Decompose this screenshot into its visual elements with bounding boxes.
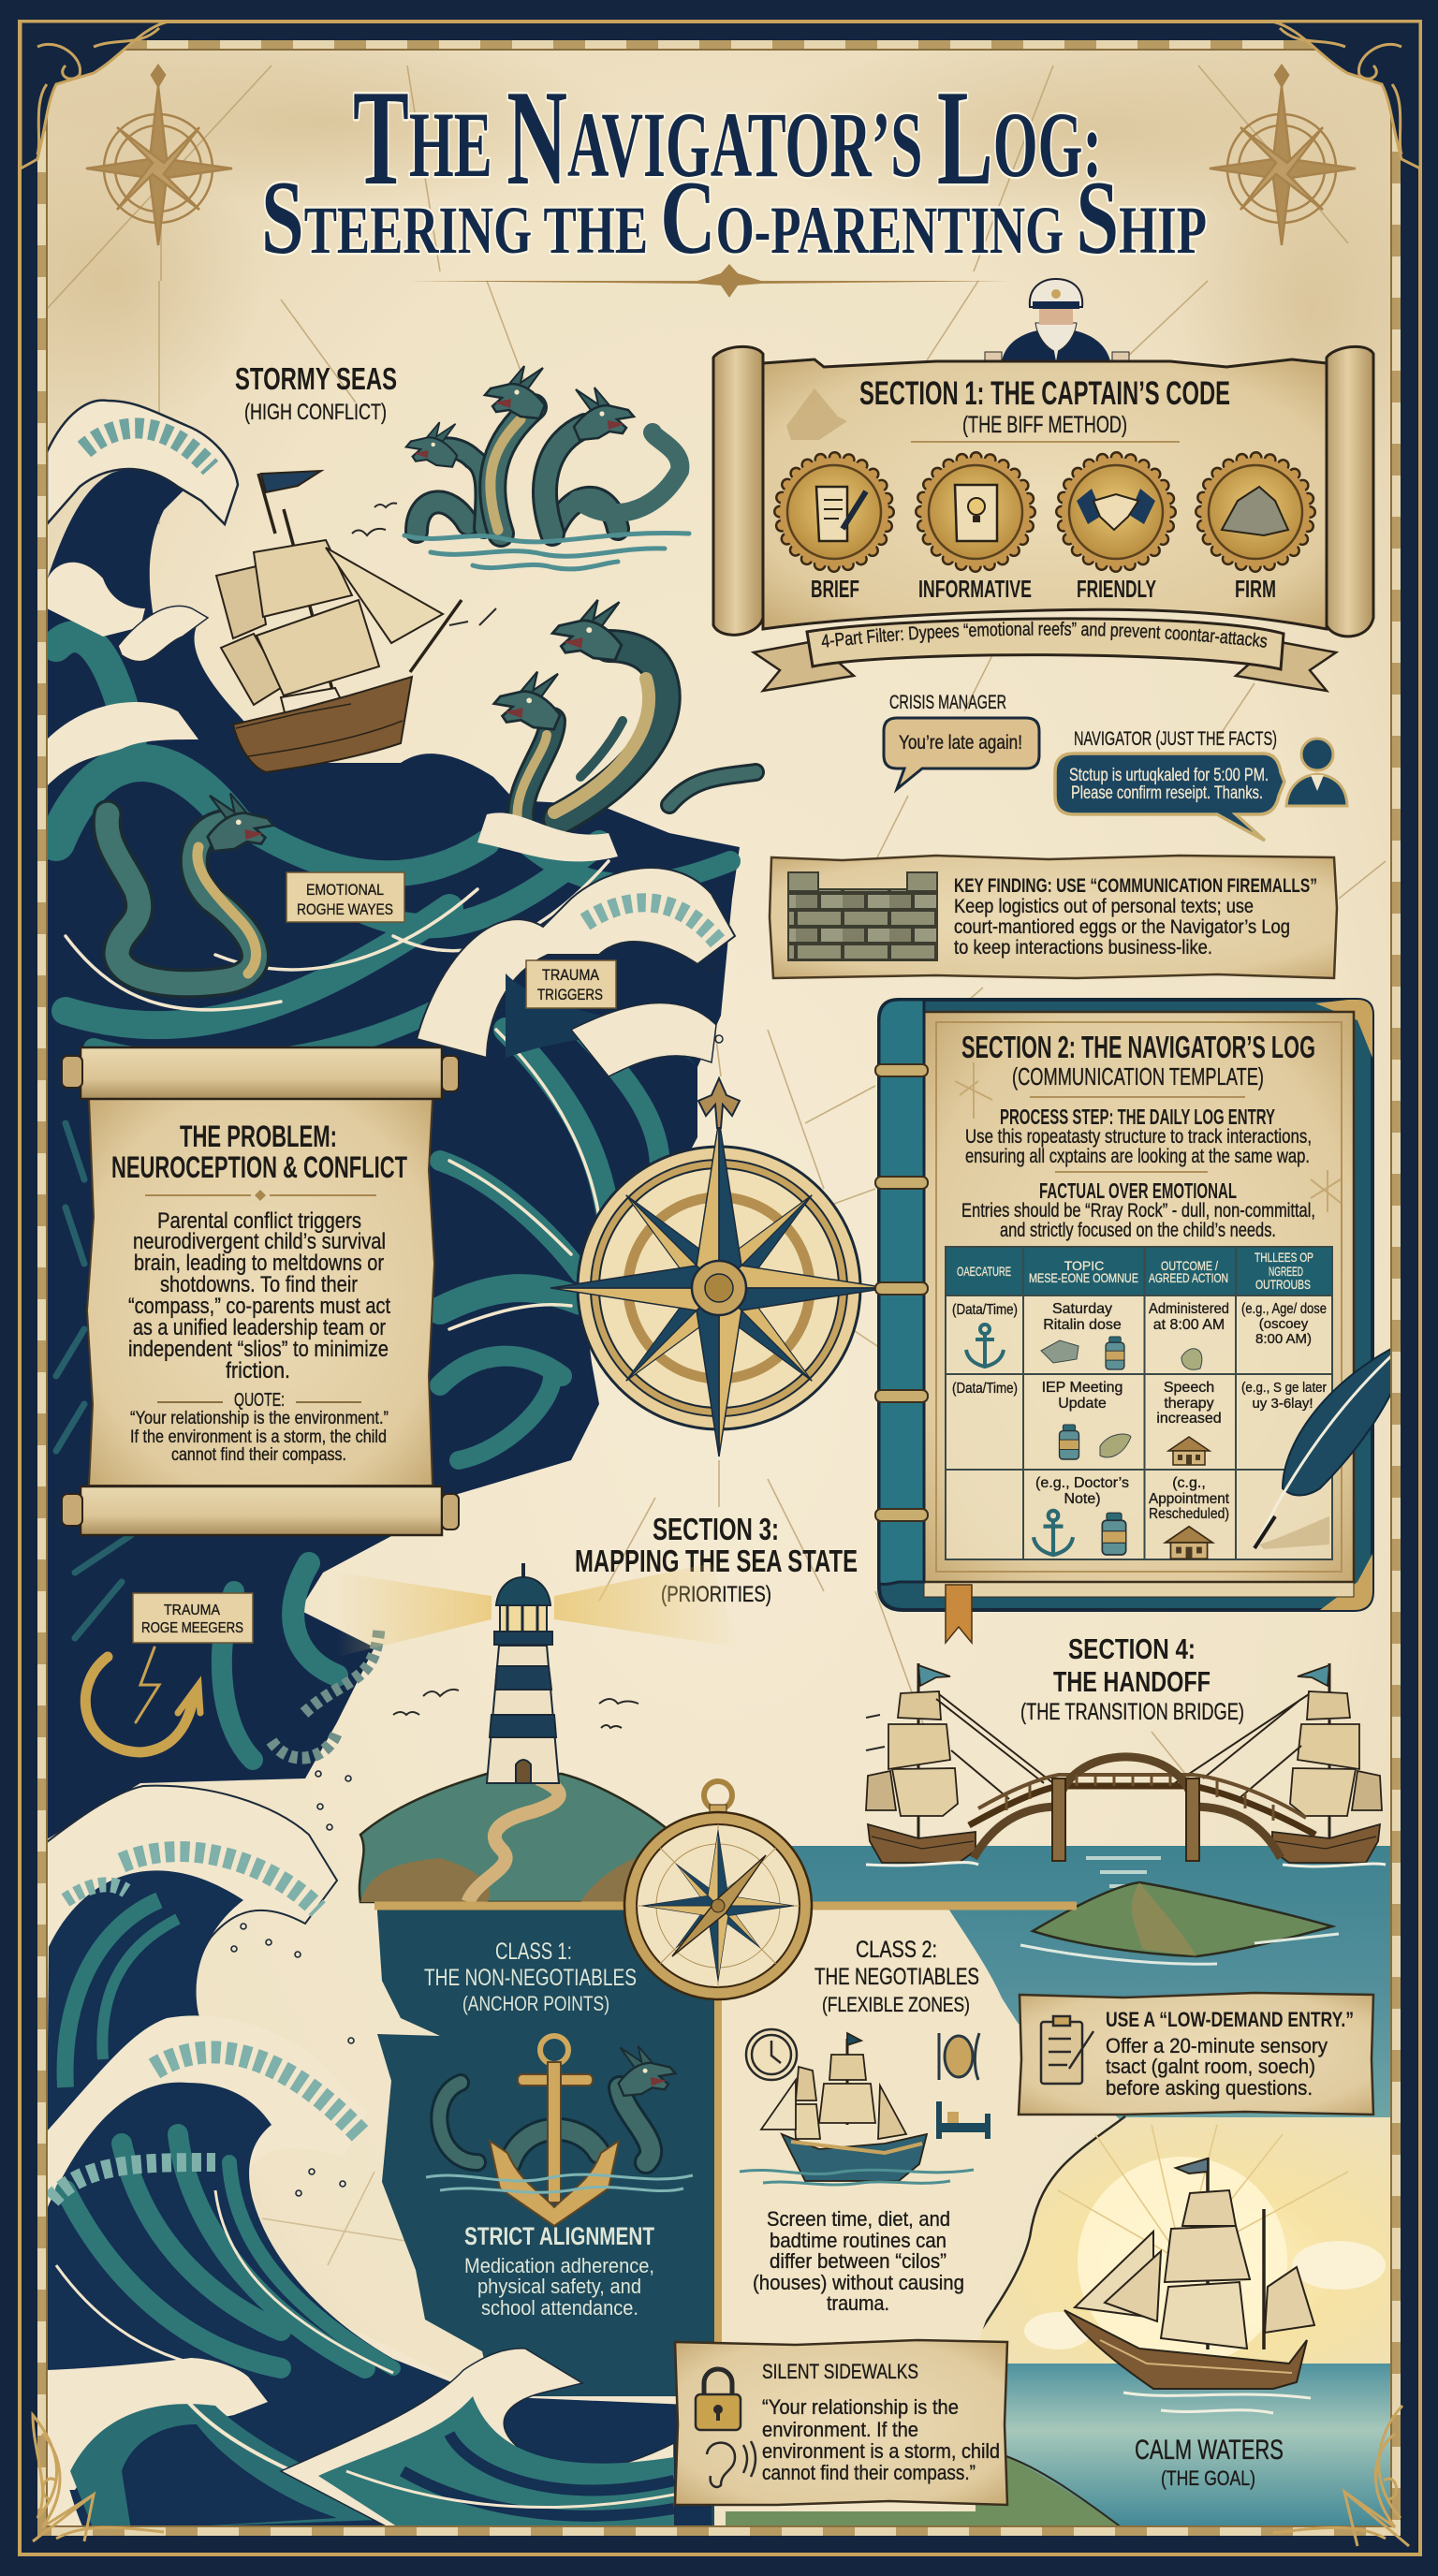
corner ornament bottom right	[1273, 2406, 1409, 2546]
calm waters scene background	[726, 2116, 1395, 2530]
banner: 4-part filter	[751, 617, 1339, 693]
icon: clipboard	[1041, 2016, 1093, 2084]
problem scroll: friction.	[226, 1358, 290, 1383]
corner ornament top left	[21, 22, 169, 168]
low-demand entry card: USE A “LOW-DEMAND ENTRY.”	[1106, 2008, 1354, 2031]
scroll paper	[763, 359, 1327, 629]
wave A	[47, 1786, 337, 2144]
log table: increased	[1156, 1411, 1222, 1427]
class 1 panel background	[377, 1906, 714, 2530]
log table: uy 3-6lay!	[1252, 1396, 1313, 1412]
calm ship	[1064, 2158, 1314, 2413]
section 2 logbook	[875, 1000, 1410, 1643]
section 4 sea	[714, 1846, 1395, 2125]
section 2 logbook: Use this ropeatasty structure to track interactions,	[965, 1126, 1312, 1148]
section 2 logbook: FACTUAL OVER EMOTIONAL	[1039, 1178, 1237, 1203]
title: T	[353, 62, 409, 213]
silent sidewalks card: environment. If the	[762, 2418, 918, 2441]
banner: 4-part filter: 4-Part Filter: Dypees “emotional reefs” and prevent coontar-attacks	[822, 622, 1268, 648]
corner ornament bottom left	[33, 2415, 164, 2541]
right ship	[1272, 1663, 1382, 1863]
icon: padlock	[696, 2369, 741, 2430]
label: emotional rogue waves: EMOTIONAL	[306, 881, 384, 899]
section 2 logbook: and strictly focused on the child’s needs.	[1000, 1220, 1276, 1241]
title divider	[408, 264, 1009, 298]
title: STEERING THE CO-PARENTING SHIP	[261, 160, 1207, 276]
icon: gold anchor fluke	[85, 1647, 200, 1752]
navigator bubble: Stctup is urtuqkaled for 5:00 PM.	[1069, 766, 1269, 785]
ship watermark	[786, 388, 847, 440]
log table: Ritalin dose	[1043, 1317, 1122, 1333]
class 2: negotiables: Screen time, diet, and	[767, 2207, 950, 2231]
log table: OUTCOME /	[1161, 1258, 1218, 1273]
medallion: brief	[780, 458, 888, 566]
key finding card: to keep interactions business-like.	[954, 937, 1212, 959]
icon: clock	[746, 2029, 797, 2080]
log table: (oscoey	[1259, 1316, 1309, 1332]
lighthouse light beams	[337, 1563, 740, 1657]
medallion: informative	[921, 458, 1030, 566]
label: trauma rogue meegers: TRAUMA	[164, 1603, 220, 1618]
log table: OUTROUBS	[1255, 1277, 1311, 1292]
section 4 heading: THE HANDOFF	[1053, 1665, 1211, 1698]
log table: THLLEES OP	[1255, 1250, 1313, 1265]
class 1: non-negotiables: STRICT ALIGNMENT	[464, 2222, 654, 2250]
section 2 logbook: PROCESS STEP: THE DAILY LOG ENTRY	[1000, 1105, 1275, 1129]
medallion: firm	[1201, 458, 1310, 566]
class 2: negotiables: badtime routines can	[770, 2229, 946, 2252]
calm waters label: (THE GOAL)	[1161, 2466, 1255, 2490]
problem scroll: “Your relationship is the environment.”	[130, 1409, 389, 1428]
problem scroll: as a unified leadership team or	[133, 1315, 386, 1340]
anchor	[490, 2036, 619, 2226]
class 2: negotiables: CLASS 2:	[856, 1937, 937, 1963]
log table: NGREED	[1269, 1264, 1303, 1279]
log table: (Data/Time)	[952, 1381, 1018, 1397]
section 2 logbook: ensuring all cxptains are looking at the same wap.	[965, 1146, 1310, 1167]
icon: navigator person	[1286, 739, 1347, 806]
wave B	[47, 2015, 712, 2530]
label: emotional rogue waves	[286, 872, 404, 922]
silent sidewalks card: environment is a storm, child	[762, 2439, 1000, 2463]
pocket compass	[624, 1781, 812, 1999]
crisis manager bubble: You’re late again!	[899, 732, 1022, 754]
silent sidewalks card	[675, 2340, 1007, 2505]
silent sidewalks card: “Your relationship is the	[762, 2395, 959, 2419]
gold chart lines	[374, 1906, 1077, 2349]
wave C bottom left	[47, 2358, 268, 2490]
title: L	[937, 62, 993, 213]
class 2: negotiables: differ between “cilos”	[770, 2249, 946, 2273]
captain	[985, 279, 1129, 365]
log table: AGREED ACTION	[1149, 1270, 1228, 1285]
calm waters label	[1135, 2435, 1284, 2490]
log table	[946, 1247, 1332, 1559]
central compass rose	[550, 1078, 888, 1456]
birds	[352, 504, 885, 1750]
class 2: negotiables: (FLEXIBLE ZONES)	[822, 1993, 970, 2016]
lighthouse island	[360, 1774, 668, 1902]
section 4 heading: SECTION 4:	[1068, 1632, 1196, 1665]
log table: 8:00 AM)	[1255, 1331, 1312, 1347]
bridge between ships	[866, 1663, 1386, 1886]
class 1: non-negotiables: physical safety, and	[477, 2275, 641, 2298]
storm ship	[216, 471, 462, 772]
stormy seas heading: STORMY SEAS	[235, 361, 397, 396]
section 4 heading	[1020, 1632, 1244, 1725]
big foam crest top left	[47, 401, 238, 524]
problem scroll: Parental conflict triggers	[157, 1208, 361, 1234]
compass rose top left	[86, 66, 232, 245]
label: trauma rogue meegers: ROGE MEEGERS	[141, 1620, 243, 1636]
crisis manager bubble: CRISIS MANAGER	[889, 692, 1006, 713]
log table: MESE-EONE OOMNUE	[1029, 1270, 1138, 1285]
problem scroll: shotdowns. To find their	[160, 1272, 358, 1297]
title: N	[506, 62, 567, 213]
compass rose top right	[1210, 66, 1356, 245]
wave D bottom right	[281, 2349, 674, 2530]
key finding card	[770, 856, 1337, 978]
section 1 scroll: the captain's code: BRIEF	[811, 575, 859, 603]
problem scroll: brain, leading to meltdowns or	[134, 1251, 384, 1276]
island path and cliff	[360, 1778, 668, 1902]
class 2 panel background	[714, 1906, 1039, 2511]
key finding card: Keep logistics out of personal texts; use	[954, 896, 1254, 917]
problem scroll: independent “slios” to minimize	[128, 1337, 389, 1362]
problem scroll: If the environment is a storm, the child	[130, 1427, 387, 1447]
class 2: negotiables: THE NEGOTIABLES	[814, 1964, 979, 1990]
low-demand entry card	[1019, 1993, 1373, 2115]
class 1: non-negotiables: CLASS 1:	[495, 1939, 572, 1965]
low-demand entry card: Offer a 20-minute sensory	[1106, 2034, 1328, 2057]
log table: at 8:00 AM	[1153, 1317, 1225, 1333]
problem scroll: THE PROBLEM:	[180, 1120, 337, 1153]
stormy sea mass	[47, 401, 740, 1839]
top roller	[62, 1047, 459, 1099]
section 3 heading: SECTION 3:	[653, 1512, 779, 1546]
book spine	[879, 1000, 924, 1584]
log table: (e.g., Age/ dose	[1241, 1301, 1327, 1317]
icon: ship	[740, 2033, 974, 2185]
log table: OAECATURE	[957, 1264, 1011, 1279]
log table: Administered	[1149, 1301, 1229, 1317]
scroll left roller	[713, 346, 763, 635]
problem scroll	[62, 1047, 459, 1535]
scroll right roller	[1327, 346, 1373, 637]
log table: Update	[1058, 1396, 1107, 1412]
label: trauma triggers: TRAUMA	[542, 966, 600, 984]
left ship	[866, 1663, 976, 1863]
bottom roller	[62, 1486, 459, 1535]
log table: Appointment	[1149, 1491, 1230, 1507]
log table: TOPIC	[1064, 1258, 1104, 1273]
small island	[1020, 1882, 1339, 1964]
key finding card: court-mantiored eggs or the Navigator’s Log	[954, 916, 1290, 938]
class 1: non-negotiables: THE NON-NEGOTIABLES	[424, 1965, 637, 1991]
three-headed sea serpent	[404, 366, 689, 569]
label: emotional rogue waves: ROGHE WAYES	[297, 900, 393, 918]
title: OG:	[993, 93, 1102, 197]
crisis manager bubble	[884, 692, 1039, 789]
problem scroll: QUOTE:	[234, 1390, 285, 1411]
label: trauma triggers: TRIGGERS	[537, 986, 603, 1003]
silent sidewalks card: cannot find their compass.”	[762, 2461, 976, 2484]
bookmark	[946, 1585, 972, 1643]
silent sidewalks card: SILENT SIDEWALKS	[762, 2360, 918, 2383]
low-demand entry card: before asking questions.	[1106, 2076, 1313, 2100]
section 2 logbook: Entries should be “Rray Rock” - dull, non-committal,	[961, 1200, 1315, 1222]
serpent in the waves lower left	[107, 794, 273, 984]
section 1 scroll: the captain's code: FRIENDLY	[1077, 575, 1156, 603]
problem scroll: NEUROCEPTION & CONFLICT	[111, 1150, 407, 1184]
problem scroll: cannot find their compass.	[171, 1445, 346, 1465]
lower left waves	[47, 1629, 712, 2530]
book page	[924, 1012, 1354, 1582]
log table: (e.g., S ge later	[1241, 1380, 1327, 1396]
serpent behind anchor	[439, 2046, 675, 2162]
section 2 logbook: (COMMUNICATION TEMPLATE)	[1012, 1062, 1264, 1090]
navigator bubble: Please confirm reseipt. Thanks.	[1071, 783, 1263, 803]
section 1 scroll: the captain's code	[713, 346, 1373, 637]
title	[261, 62, 1207, 276]
log table: Note)	[1064, 1491, 1101, 1507]
icon: bed	[936, 2101, 990, 2139]
lighthouse	[487, 1563, 559, 1783]
low-demand entry card: tsact (galnt room, soech)	[1106, 2055, 1315, 2078]
corner ornament top right	[1272, 22, 1420, 168]
serpent in the waves right	[477, 600, 756, 861]
class 1: non-negotiables	[424, 1939, 693, 2320]
class 1: non-negotiables: Medication adherence,	[464, 2254, 654, 2277]
problem scroll: “compass,” co-parents must act	[128, 1294, 390, 1319]
log table: (c.g.,	[1172, 1475, 1206, 1491]
section 1 scroll: the captain's code: (THE BIFF METHOD)	[962, 412, 1127, 438]
section 3 heading: (PRIORITIES)	[661, 1582, 771, 1607]
book cover	[879, 1000, 1372, 1610]
log table: Rescheduled)	[1149, 1506, 1229, 1522]
class 1: non-negotiables: (ANCHOR POINTS)	[462, 1992, 609, 2015]
log table: therapy	[1164, 1396, 1214, 1412]
log table: IEP Meeting	[1042, 1380, 1123, 1396]
section 1 scroll: the captain's code: SECTION 1: THE CAPTAIN’S CODE	[859, 375, 1230, 412]
section 1 scroll: the captain's code: FIRM	[1235, 575, 1276, 603]
section 3 heading: MAPPING THE SEA STATE	[575, 1544, 858, 1578]
calm waters label: CALM WATERS	[1135, 2435, 1284, 2466]
class 2: negotiables	[740, 1937, 990, 2315]
icon: stone wall	[788, 872, 937, 960]
title: AVIGATOR’S	[567, 93, 937, 197]
class 1: non-negotiables: school attendance.	[481, 2296, 638, 2320]
section 3 heading	[575, 1512, 858, 1607]
log table: (e.g., Doctor’s	[1035, 1475, 1129, 1491]
section 1 scroll: the captain's code: INFORMATIVE	[918, 575, 1032, 603]
title: HE	[409, 93, 506, 197]
log table: Saturday	[1052, 1301, 1112, 1317]
navigator bubble	[1055, 728, 1347, 841]
table icons	[966, 1325, 1212, 1559]
log table: (Data/Time)	[952, 1302, 1018, 1318]
label: trauma rogue meegers	[133, 1593, 253, 1643]
class 2: negotiables: trauma.	[827, 2291, 889, 2315]
class 2: negotiables: (houses) without causing	[753, 2271, 964, 2294]
label: trauma triggers	[526, 960, 616, 1008]
icon: quill feather	[1255, 1339, 1410, 1549]
log table: Speech	[1164, 1380, 1214, 1396]
medallion: friendly	[1062, 458, 1170, 566]
key finding card: KEY FINDING: USE “COMMUNICATION FIREMALLS”	[954, 875, 1317, 897]
icon: plate and cutlery	[939, 2033, 979, 2080]
trauma trigger wave crest	[417, 868, 735, 1058]
stormy seas heading: (HIGH CONFLICT)	[244, 400, 387, 425]
stormy seas heading	[235, 361, 397, 425]
navigator bubble: NAVIGATOR (JUST THE FACTS)	[1074, 728, 1277, 750]
problem scroll: neurodivergent child’s survival	[133, 1229, 386, 1254]
scroll paper	[87, 1099, 434, 1486]
icon: ear	[707, 2441, 756, 2487]
section 4 heading: (THE TRANSITION BRIDGE)	[1020, 1699, 1244, 1725]
